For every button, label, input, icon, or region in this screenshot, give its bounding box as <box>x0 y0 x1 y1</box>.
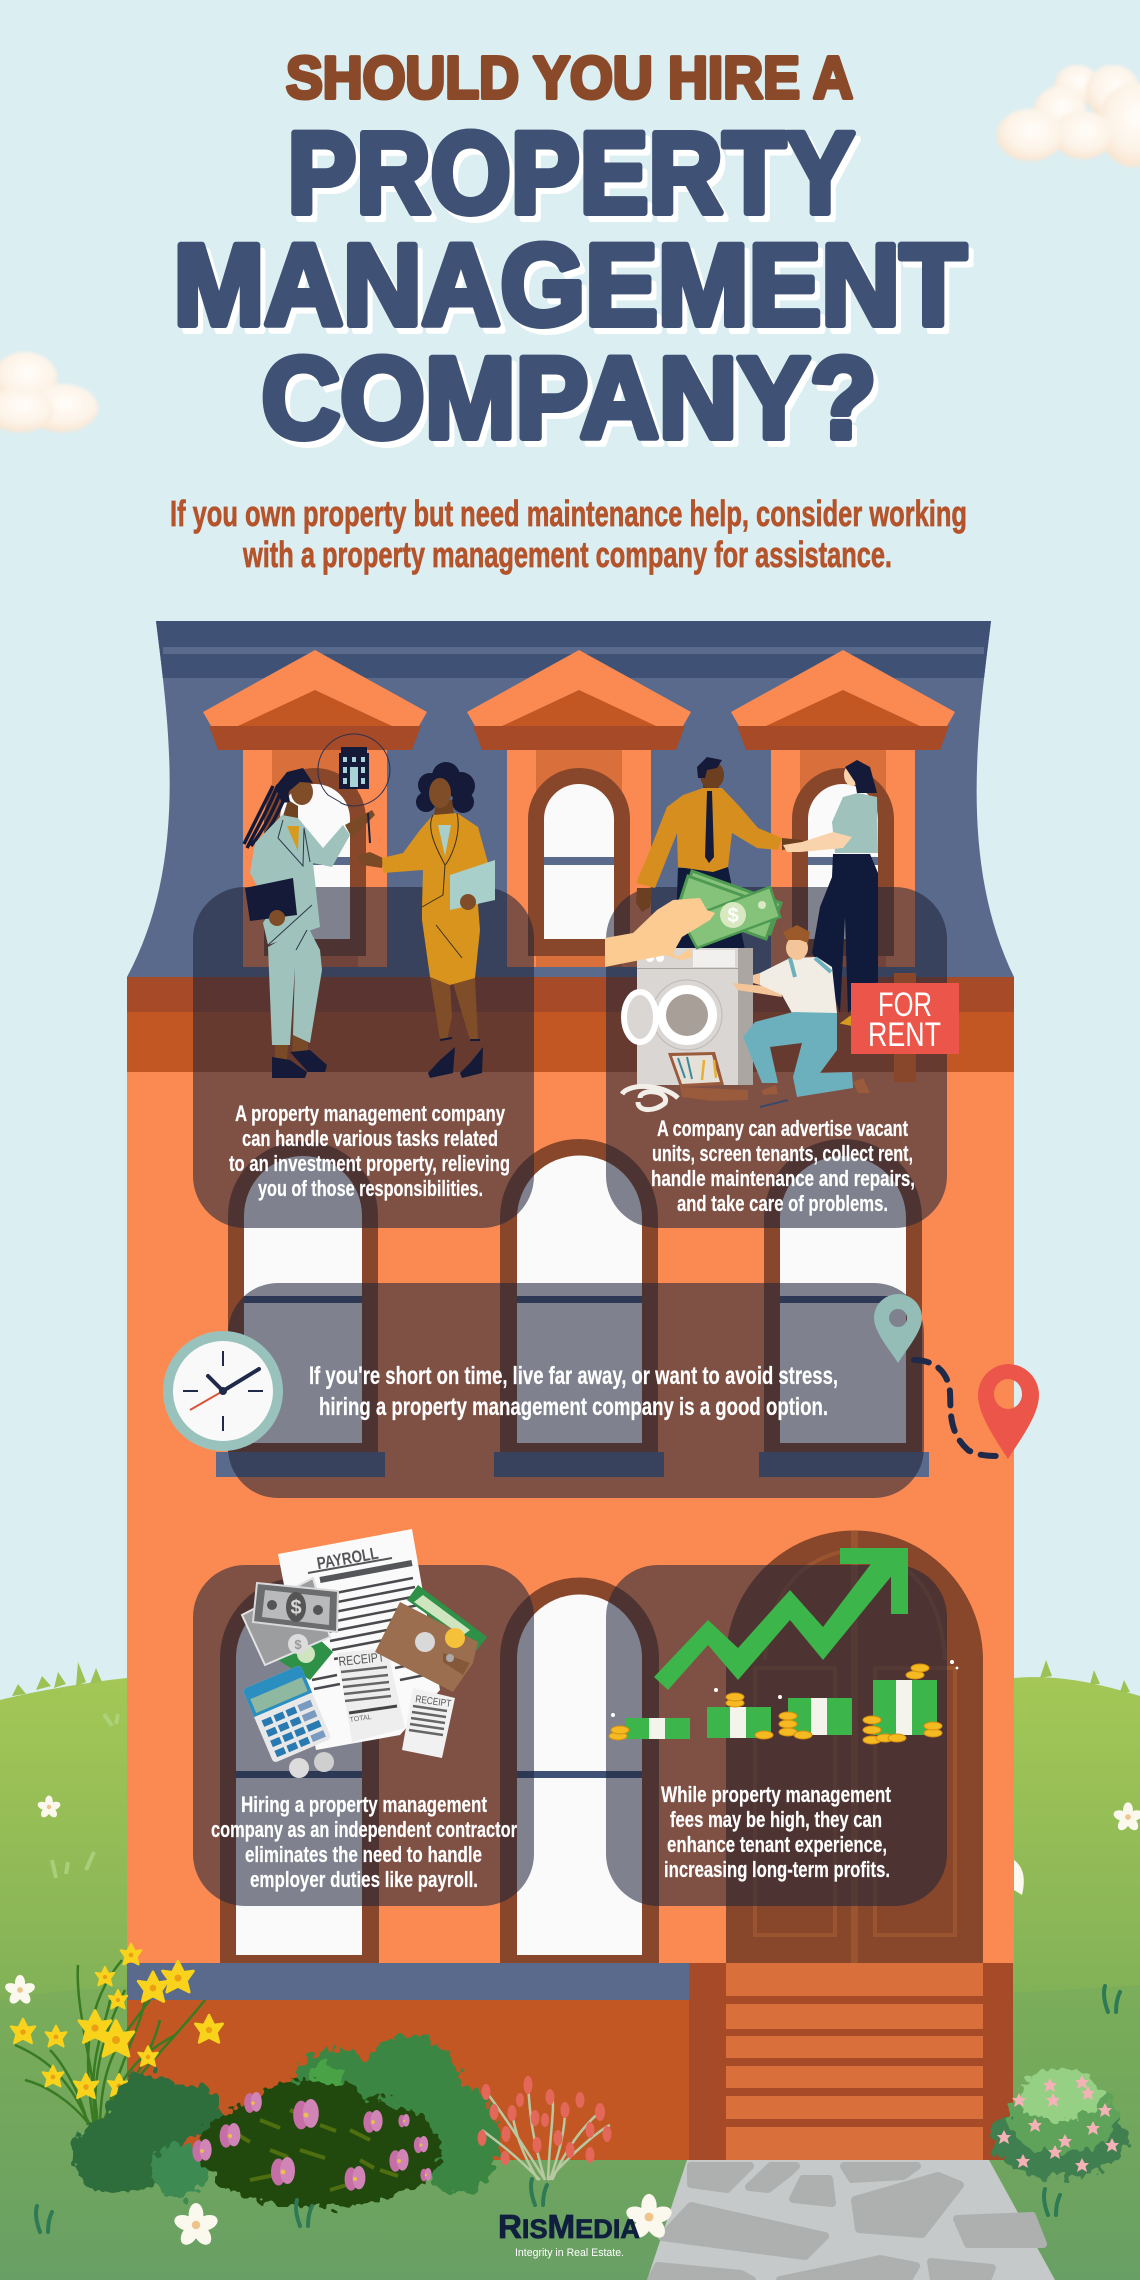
text: advertising and maintenance: handle maintenance and repairs, <box>651 1166 915 1191</box>
text: short on time <box>309 1362 838 1421</box>
icon: teal map pin <box>874 1294 922 1363</box>
icon: red map pin <box>978 1364 1039 1459</box>
text: advertising and maintenance <box>651 1116 915 1216</box>
dashed route <box>914 1360 999 1456</box>
lawn <box>0 1660 1140 2280</box>
panel: time backdrop <box>228 1283 924 1498</box>
icon: washing machine <box>624 948 753 1085</box>
icon: wallet <box>375 1585 487 1692</box>
plant: mid green shrubs <box>290 2035 500 2195</box>
dormer middle <box>467 650 691 967</box>
icon: receipt small: RECEIPT <box>415 1694 452 1710</box>
text: property management tasks: to an investment property, relieving <box>229 1151 510 1176</box>
icon: receipt small <box>402 1688 455 1758</box>
icon: cash pile <box>242 1578 338 1680</box>
icon: money stack 3 <box>779 1698 852 1739</box>
text: property management tasks <box>229 1101 510 1201</box>
title line: property: PROPERTY <box>288 110 854 238</box>
title line: should you hire a: SHOULD YOU HIRE A <box>286 45 853 111</box>
plant: flowering dark shrub <box>192 2080 442 2208</box>
icon: receipt large: TOTAL <box>349 1714 372 1724</box>
icon: calculator <box>242 1665 332 1763</box>
title line: management: MANAGEMENT <box>174 222 966 350</box>
icon: money stack 4 <box>863 1664 942 1744</box>
decoration: white flowers on lawn <box>4 1795 1140 2248</box>
title line: management: MANAGEMENT <box>178 228 972 356</box>
decoration: grass tufts <box>36 1986 1120 2232</box>
title line: company: COMPANY? <box>262 334 876 462</box>
icon: toolbox <box>668 1052 748 1101</box>
house <box>120 621 1020 2160</box>
text: advertising and maintenance: A company can advertise vacant <box>657 1116 908 1141</box>
logo: RISMedia: Integrity in Real Estate. <box>515 2247 624 2259</box>
title <box>174 45 972 468</box>
text: long-term profits: fees may be high, they can <box>670 1807 882 1832</box>
panel: tasks backdrop <box>193 887 534 1228</box>
roof <box>120 621 1020 977</box>
body walls <box>127 977 1014 1963</box>
icon: hand holding cash <box>605 871 781 967</box>
figure: woman shaking hands <box>783 760 878 1025</box>
panel: advertising backdrop <box>606 887 947 1228</box>
document: payroll sheet: PAYROLL <box>315 1544 380 1573</box>
text: advertising and maintenance: units, screen tenants, collect rent, <box>652 1141 913 1166</box>
dormer left <box>203 650 427 967</box>
subtitle: with a property management company for assistance. <box>242 534 892 575</box>
text: property management tasks: you of those responsibilities. <box>258 1176 483 1201</box>
icon: money stack 2 <box>707 1693 773 1739</box>
icon: rising arrow <box>654 1548 908 1690</box>
document: payroll sheet <box>278 1529 440 1750</box>
text: short on time: If you're short on time, live far away, or want to avoid stress, <box>309 1362 838 1390</box>
text: advertising and maintenance: and take care of problems. <box>677 1191 888 1216</box>
panel: profits backdrop <box>606 1565 947 1906</box>
sparkles <box>611 1660 958 1717</box>
text: short on time: hiring a property management company is a good option. <box>319 1393 828 1421</box>
sign: for rent <box>851 973 959 1082</box>
text: long-term profits: While property management <box>661 1782 892 1807</box>
illustration: growth chart with money stacks <box>609 1548 958 1744</box>
figure: man in mustard shirt <box>636 757 803 950</box>
stone path <box>647 2160 1055 2280</box>
plant: daffodils <box>11 1944 223 2133</box>
illustration: handshake, washer, hand with cash <box>605 757 959 1110</box>
text: independent contractor: company as an independent contractor <box>211 1817 517 1842</box>
cloud left <box>0 352 98 432</box>
icon: cash pile: $ <box>294 1637 302 1652</box>
icon: silver coins <box>289 1752 334 1778</box>
text: long-term profits: increasing long-term profits. <box>664 1857 890 1882</box>
sign: for rent: RENT <box>868 1016 941 1054</box>
dormer right <box>731 650 955 967</box>
text: independent contractor: eliminates the need to handle <box>245 1842 482 1867</box>
plant: coral flower stalks <box>478 2076 612 2180</box>
logo: RISMedia: RISMEDIA <box>498 2208 640 2245</box>
figure: agent in mustard suit <box>357 762 495 1078</box>
text: long-term profits <box>661 1782 892 1882</box>
upper windows <box>216 1139 929 1477</box>
icon: money stack 1 <box>609 1718 690 1740</box>
text: independent contractor <box>211 1792 517 1892</box>
plant: pink blossom shrub right <box>992 2069 1128 2178</box>
porch base <box>127 1963 689 2160</box>
illustration: two agents exchanging keys <box>244 734 495 1078</box>
cloud top right <box>997 65 1140 167</box>
front door <box>726 1530 983 1963</box>
icon: receipt large <box>337 1648 405 1742</box>
text: property management tasks: can handle various tasks related <box>242 1126 498 1151</box>
icon: hose <box>622 1086 678 1110</box>
panel: payroll backdrop <box>193 1565 534 1906</box>
text: long-term profits: enhance tenant experience, <box>667 1832 887 1857</box>
icon: screwdriver <box>760 1100 788 1107</box>
text: property management tasks: A property management company <box>235 1101 506 1126</box>
plant: dark green shrubs left <box>72 2073 220 2198</box>
icon: hand holding cash: $ <box>727 905 739 927</box>
subtitle <box>170 493 967 575</box>
text: independent contractor: employer duties like payroll. <box>250 1867 478 1892</box>
front steps <box>689 1963 1013 2160</box>
icon: receipt large: RECEIPT <box>338 1649 385 1669</box>
icon: keys <box>368 813 370 843</box>
title line: property: PROPERTY <box>292 116 860 244</box>
text: independent contractor: Hiring a property management <box>241 1792 488 1817</box>
icon: clock <box>163 1331 283 1451</box>
icon: cash pile: $ <box>290 1597 302 1619</box>
illustration: payroll, cash, wallet, receipts <box>242 1529 487 1778</box>
icon: building speech bubble <box>318 734 390 806</box>
sign: for rent: FOR <box>878 986 932 1024</box>
figure: agent in teal suit <box>244 768 375 1078</box>
title line: company: COMPANY? <box>266 340 882 468</box>
icon: location route <box>874 1294 1039 1459</box>
ground floor windows <box>220 1577 659 1963</box>
figure: repair worker <box>733 925 870 1097</box>
